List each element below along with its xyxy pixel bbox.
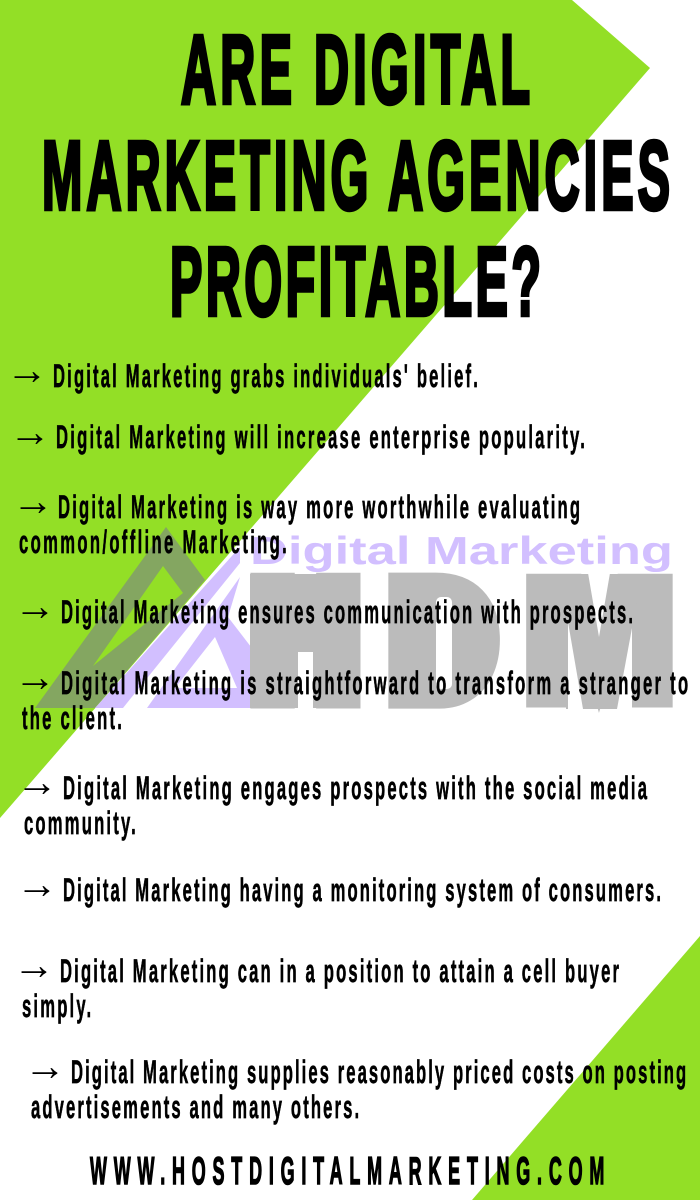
watermark letters: HDM: D	[390, 551, 495, 731]
logo mark: lavender band	[95, 547, 240, 708]
point 3: common/offline Marketing.	[19, 525, 287, 561]
point 6: community.	[24, 806, 136, 842]
title	[42, 17, 670, 337]
watermark logo: HDM Digital Marketing	[35, 527, 673, 731]
point 9: Digital Marketing supplies reasonably priced costs on posting	[71, 1055, 686, 1091]
point 9: advertisements and many others.	[31, 1090, 359, 1126]
watermark letters: HDM	[250, 550, 672, 731]
green arrow background shape	[0, 0, 650, 818]
footer website URL: WWW.HOSTDIGITALMARKETING.COM	[90, 1151, 604, 1193]
point 4: →	[14, 582, 56, 629]
logo mark: lavender triangle	[147, 577, 298, 708]
point 7: →	[16, 860, 58, 907]
point 5: Digital Marketing is straightforward to transform a stranger to	[61, 666, 688, 702]
watermark letters: HDM: M	[527, 550, 672, 731]
point 8: Digital Marketing can in a position to attain a cell buyer	[60, 954, 619, 990]
point 4	[14, 582, 633, 631]
point 7: Digital Marketing having a monitoring system of consumers.	[63, 873, 661, 909]
title: PROFITABLE?	[170, 229, 541, 337]
point 8: simply.	[22, 989, 91, 1025]
point 7	[16, 860, 661, 909]
point 1	[6, 346, 478, 395]
point 2: Digital Marketing will increase enterprise popularity.	[56, 420, 585, 456]
point 5	[14, 653, 688, 737]
point 1: →	[6, 346, 48, 393]
point 8	[13, 941, 619, 1025]
point 3	[12, 477, 580, 561]
point 8: →	[13, 941, 55, 988]
point 3: →	[12, 477, 54, 524]
point 9	[24, 1042, 686, 1126]
point 2	[9, 408, 585, 456]
title: ARE DIGITAL	[181, 17, 530, 125]
point 9: →	[24, 1042, 66, 1089]
logo mark: gray triangle	[35, 527, 205, 708]
watermark wordmark: Digital Marketing: Digital Marketing	[250, 530, 673, 573]
point 1: Digital Marketing grabs individuals' belief.	[53, 359, 478, 395]
green corner triangle	[472, 936, 700, 1200]
point 6	[16, 758, 647, 842]
point 2: →	[9, 408, 51, 455]
point 3: Digital Marketing is way more worthwhile evaluating	[58, 490, 580, 526]
point 5: →	[14, 653, 56, 700]
point 6: →	[16, 758, 58, 805]
point 6: Digital Marketing engages prospects with the social media	[63, 771, 647, 807]
title: MARKETING AGENCIES	[42, 123, 670, 231]
watermark letters: HDM: H	[252, 550, 359, 730]
point 5: the client.	[22, 701, 122, 737]
point 4: Digital Marketing ensures communication with prospects.	[61, 595, 633, 631]
